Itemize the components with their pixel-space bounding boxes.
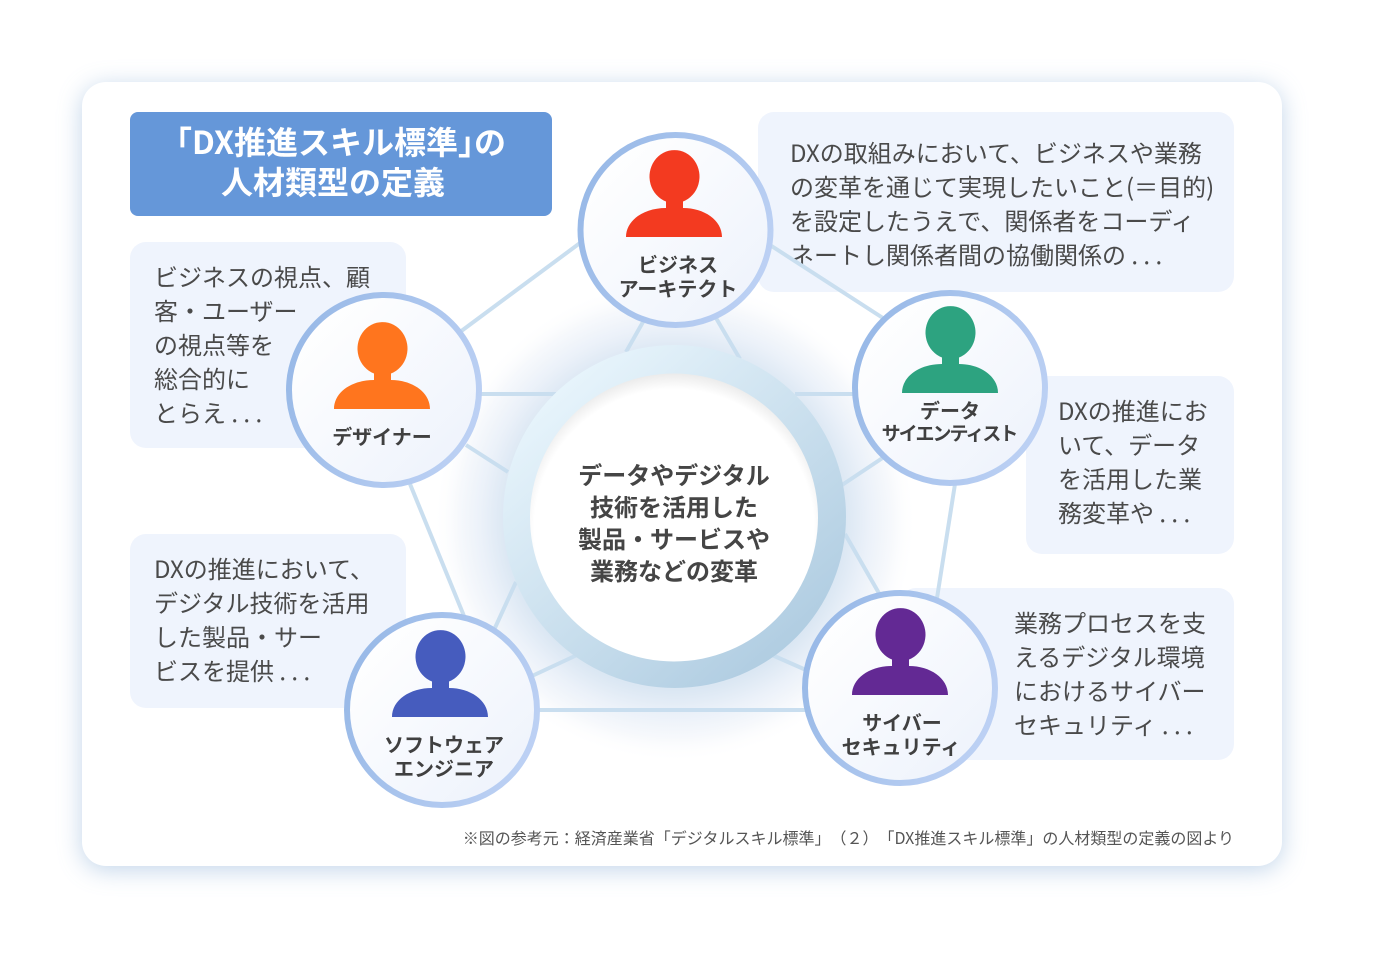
- text box: cybersecurity: 業務プロセスを支: [1014, 604, 1206, 639]
- text box: data scientist: DXの推進にお: [1058, 392, 1208, 427]
- center circle: [503, 345, 846, 688]
- icon: person purple: [852, 608, 948, 695]
- footnote: ※図の参考元：経済産業省「デジタルスキル標準」（２）「DX推進スキル標準」の人材類型の定義の図より: [463, 825, 1234, 849]
- text box: designer: ビジネスの視点、顧: [154, 258, 370, 293]
- text box: software engineer: した製品・サー: [154, 618, 322, 653]
- text box: business architect: を設定したうえで、関係者をコーディ: [790, 202, 1195, 237]
- node: designer: デザイナー: [332, 421, 432, 450]
- text box: cybersecurity: におけるサイバー: [1014, 672, 1206, 707]
- icon: person green: [902, 306, 998, 393]
- text box: business architect: の変革を通じて実現したいこと(＝目的): [790, 168, 1214, 203]
- card background: [82, 82, 1282, 866]
- text box: designer: の視点等を: [154, 326, 274, 361]
- center circle: データやデジタル: [578, 456, 770, 491]
- title: [130, 112, 552, 216]
- node: cybersecurity: サイバー: [862, 707, 942, 736]
- text box: designer: [130, 242, 406, 448]
- text box: data scientist: を活用した業: [1058, 460, 1202, 495]
- center glow: [433, 279, 917, 763]
- title: 人材類型の定義: [221, 158, 445, 204]
- icon: person orange: [334, 322, 430, 409]
- node: software engineer: [347, 615, 537, 805]
- text box: designer: 客・ユーザー: [154, 292, 298, 327]
- text box: software engineer: DXの推進において、: [154, 550, 374, 585]
- text box: data scientist: [1026, 376, 1234, 554]
- center circle: 業務などの変革: [590, 552, 758, 587]
- node: business architect: ビジネス: [638, 249, 718, 278]
- text box: data scientist: 務変革や . . .: [1058, 494, 1190, 529]
- node: business architect: アーキテクト: [619, 273, 737, 302]
- text box: business architect: DXの取組みにおいて、ビジネスや業務: [790, 134, 1202, 169]
- text box: cybersecurity: えるデジタル環境: [1014, 638, 1205, 673]
- icon: person red: [626, 150, 722, 237]
- center circle: 技術を活用した: [590, 488, 758, 523]
- node: data scientist: データ: [920, 395, 980, 424]
- node: software engineer: エンジニア: [394, 753, 494, 782]
- title: 「DX推進スキル標準」の: [160, 118, 506, 164]
- network lines: [410, 243, 955, 710]
- text box: software engineer: [130, 534, 406, 708]
- node: designer: [289, 295, 479, 485]
- text box: data scientist: いて、データ: [1058, 426, 1200, 461]
- text box: software engineer: ビスを提供 . . .: [154, 652, 310, 687]
- text box: business architect: [758, 112, 1234, 292]
- icon: person blue: [392, 630, 488, 717]
- text box: business architect: ネートし関係者間の協働関係の . . .: [790, 236, 1162, 271]
- node: business architect: [580, 135, 770, 325]
- node: data scientist: サイエンティスト: [882, 419, 1016, 446]
- text box: designer: 総合的に: [154, 360, 250, 395]
- text box: designer: とらえ . . .: [154, 394, 262, 429]
- text box: software engineer: デジタル技術を活用: [154, 584, 370, 619]
- text box: cybersecurity: セキュリティ . . .: [1014, 706, 1193, 741]
- node: cybersecurity: セキュリティ: [842, 731, 960, 760]
- node: software engineer: ソフトウェア: [384, 729, 504, 758]
- text box: cybersecurity: [900, 588, 1234, 760]
- node: cybersecurity: [805, 593, 995, 783]
- node: data scientist: [855, 293, 1045, 483]
- center circle: 製品・サービスや: [578, 520, 770, 555]
